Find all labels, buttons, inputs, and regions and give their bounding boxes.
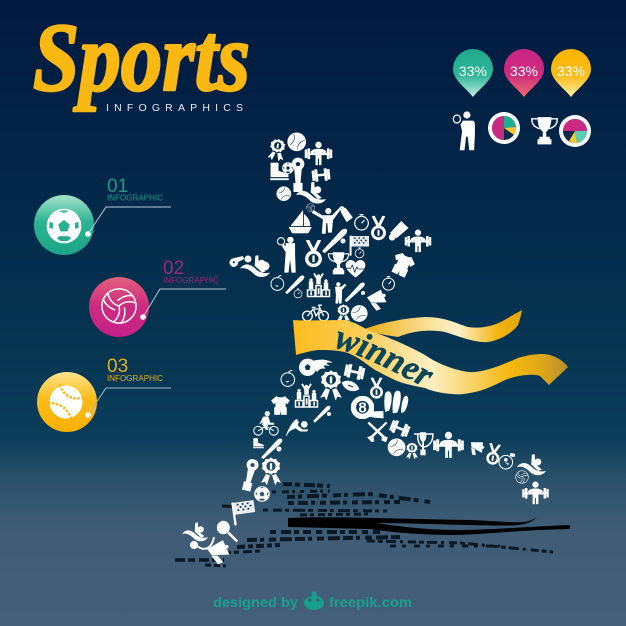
eight ball (351, 396, 374, 419)
checker flag (350, 236, 369, 256)
leader line (88, 207, 171, 234)
item 01: soccer (34, 176, 171, 255)
baseball (274, 184, 294, 204)
volleyball (516, 471, 528, 484)
cyclist (254, 411, 278, 435)
baseball (385, 435, 408, 459)
item 02: volleyball (89, 258, 226, 337)
ribbon front (293, 320, 568, 394)
lifter (522, 482, 548, 504)
label infographic: INFOGRAPHIC (107, 192, 163, 202)
runner (312, 208, 340, 233)
runner shadow on ground (175, 484, 570, 566)
shuttlecock (367, 405, 387, 424)
watch (294, 289, 302, 298)
head icons (268, 129, 332, 204)
swimmer (183, 523, 207, 541)
apple timer (271, 275, 284, 290)
jersey (271, 396, 290, 415)
fencing (367, 422, 388, 442)
label 02: 02 (163, 258, 184, 279)
lifter (305, 142, 332, 165)
item 03: baseball (37, 356, 171, 432)
swimmer (297, 182, 325, 203)
pie chart 1 (488, 112, 520, 144)
trophy (328, 252, 349, 274)
pin: yellow 33%: 33% (557, 63, 585, 79)
rosette (321, 371, 341, 400)
volleyball (306, 203, 315, 212)
soccer cup (241, 458, 259, 492)
label infographic: INFOGRAPHIC (107, 373, 163, 383)
circle: teal (34, 195, 94, 255)
icon: soccer ball (47, 209, 81, 243)
icon: baseball (46, 382, 86, 422)
torso and arm icons (230, 203, 431, 325)
rosette (406, 443, 418, 459)
runner figure made of sport icons (183, 129, 548, 564)
circle: magenta (89, 277, 149, 337)
label 03: 03 (107, 356, 128, 377)
medal (305, 240, 322, 267)
label infographic: INFOGRAPHIC (163, 275, 219, 285)
ribbon text: winner: winner (336, 331, 434, 384)
checker flag (232, 500, 257, 525)
stopwatch (355, 214, 368, 230)
bat (345, 283, 365, 302)
leg icons (183, 359, 548, 564)
whistle (230, 256, 244, 267)
credit text: designed by (213, 594, 298, 610)
ribbon back (362, 310, 522, 342)
lifter (434, 432, 464, 458)
podium (307, 273, 330, 297)
swimmer (241, 256, 269, 277)
swimmer (286, 419, 308, 436)
megaphone (367, 290, 386, 310)
rosette (268, 138, 286, 162)
lifter (405, 230, 431, 252)
apple (281, 370, 295, 386)
trophy (420, 432, 426, 455)
shadow: ribbon streaks (288, 517, 537, 526)
skate (253, 438, 264, 448)
icon: freepik mascot (304, 592, 324, 610)
soccer cup (292, 158, 304, 192)
leader line (88, 388, 171, 415)
rugby (340, 379, 361, 393)
footer credit (213, 592, 412, 610)
icon: volleyball (102, 289, 136, 326)
heart (346, 260, 366, 277)
pie chart 2 (559, 115, 591, 147)
podium (295, 384, 318, 408)
table tennis (499, 453, 515, 469)
swimmer (518, 454, 545, 475)
dumbbell (389, 419, 411, 438)
icon: tennis player (453, 111, 475, 150)
jersey (389, 251, 417, 279)
eight ball: 8 (358, 400, 367, 416)
trophy handles (414, 434, 433, 447)
bowling pins (385, 391, 408, 413)
percentage pins and pie icons (453, 49, 591, 150)
megaphone (466, 437, 486, 458)
rosette (337, 305, 350, 322)
flag man (335, 282, 346, 303)
megaphone (207, 540, 229, 564)
tennis player (277, 237, 295, 272)
fire ball (299, 359, 332, 376)
bat (313, 406, 330, 422)
shuttlecock (337, 206, 354, 223)
bat (261, 439, 282, 459)
credit brand: freepik.com (329, 594, 412, 610)
medal (371, 216, 386, 240)
bicycle (303, 305, 328, 321)
watch (382, 276, 394, 290)
bat (285, 276, 304, 294)
dumbbell (312, 168, 330, 182)
tennis ball (284, 129, 309, 154)
circle: yellow (37, 372, 97, 432)
leader line (143, 289, 226, 317)
winner ribbon (293, 310, 568, 394)
baseball (348, 302, 370, 325)
soccer ball (254, 486, 270, 502)
watch (355, 248, 364, 258)
shadow marks: speckled icon rows (175, 484, 553, 566)
icon: trophy (532, 117, 557, 144)
dumbbell (344, 363, 365, 380)
skate (270, 163, 289, 180)
medal (485, 443, 501, 465)
medal (370, 378, 383, 398)
shuttlecock (389, 221, 408, 240)
racket (217, 521, 238, 542)
subtitle: INFOGRAPHICS: INFOGRAPHICS (106, 102, 243, 114)
label 01: 01 (107, 176, 128, 197)
title: Sports: Sports (33, 4, 250, 112)
sailboat (289, 210, 312, 233)
rosette (262, 458, 280, 485)
soccer ball (282, 162, 294, 174)
bat (323, 229, 347, 253)
pin: teal 33%: 33% (459, 63, 487, 79)
pin: magenta 33%: 33% (510, 63, 538, 79)
